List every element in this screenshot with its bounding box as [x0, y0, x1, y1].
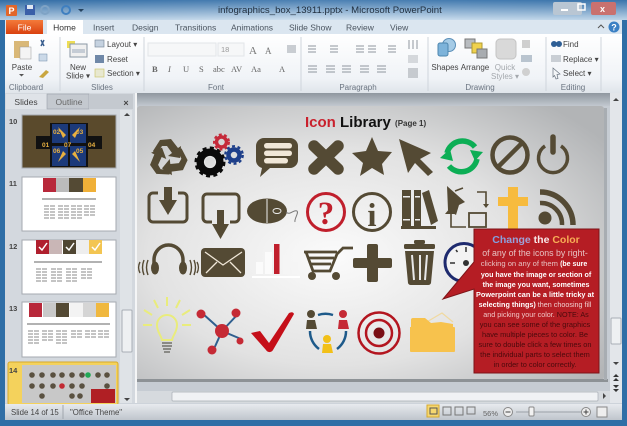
- callout body text: have multiple pieces to color. Be: [482, 330, 588, 339]
- status bar: "Office Theme": [70, 408, 122, 417]
- slides group: New: [70, 63, 86, 72]
- icon: cross: [314, 146, 338, 169]
- slide title: Icon Library: [305, 114, 391, 131]
- icon: information: i: [367, 198, 377, 234]
- editing group: Editing: [561, 83, 585, 92]
- slide number labels: [9, 117, 18, 375]
- panel tabs: [6, 94, 133, 109]
- slides group: Slide ▾: [66, 72, 90, 80]
- panel tabs: ×: [123, 98, 129, 108]
- other tabs: Animations: [231, 22, 273, 32]
- icon: target: [358, 312, 400, 354]
- callout heading: Change the Color: [492, 234, 580, 246]
- font group: I: [167, 64, 172, 74]
- other tabs: [93, 22, 409, 32]
- editor area: [135, 93, 622, 403]
- icon: network: [196, 308, 244, 354]
- slides group: [66, 40, 140, 92]
- icon: mail envelope: [201, 248, 245, 277]
- icon: star: [352, 137, 392, 176]
- icon: mouse: [247, 198, 297, 224]
- thumbnail 12: [22, 240, 116, 294]
- zoom control: [483, 407, 607, 418]
- file tab: [6, 20, 43, 34]
- callout body text: selecting things) then choosing fill: [479, 300, 592, 309]
- icon: prohibited sign: [492, 138, 528, 172]
- drawing group: Styles ▾: [491, 72, 519, 81]
- thumbnail 10: 03: [76, 129, 84, 136]
- drawing group: Quick: [495, 63, 516, 72]
- thumbnail 10: 01: [42, 142, 50, 149]
- paragraph group: Paragraph: [339, 83, 377, 92]
- editing group: [551, 40, 599, 92]
- font group: abc: [213, 64, 225, 74]
- ribbon body: [5, 34, 622, 93]
- thumbnail 14 selection highlight: [8, 362, 118, 405]
- icon: download box: [149, 187, 187, 222]
- thumbnail 14: [22, 365, 116, 403]
- callout body text: Powerpoint can be a little tricky at: [476, 290, 595, 299]
- home tab: Home: [53, 22, 76, 32]
- panel scrollbar: [120, 110, 132, 403]
- callout body text: you can see some of the graphics: [480, 320, 591, 329]
- panel tabs: Slides: [14, 97, 38, 107]
- icon: power: [538, 137, 568, 173]
- icon: gears: [196, 134, 243, 176]
- thumbnail 11: [22, 177, 116, 231]
- slide number labels: 12: [9, 242, 17, 251]
- icon: books: [401, 190, 438, 229]
- panel tabs: Outline: [56, 97, 83, 107]
- icon: gold cross: [498, 187, 528, 230]
- icon: green sync: [440, 141, 483, 172]
- slide number labels: 14: [9, 366, 18, 375]
- icon: information: [354, 194, 390, 234]
- font group: AV: [231, 64, 243, 74]
- view buttons: [427, 405, 475, 417]
- thumbnail 10: 07: [64, 142, 72, 149]
- status bar: Slide 14 of 15: [11, 408, 59, 417]
- icon: chat bubble: [256, 138, 298, 177]
- callout body text: [476, 248, 595, 369]
- icon: upload box: [203, 194, 239, 239]
- icon: cursor: [399, 139, 433, 176]
- slides group: Slides: [91, 83, 113, 92]
- icon: shopping cart: [304, 248, 353, 280]
- clipboard group: Clipboard: [9, 83, 43, 92]
- font group: A: [249, 45, 257, 57]
- icon: light bulb: [143, 297, 191, 352]
- ribbon tabs: [5, 20, 622, 35]
- callout body text: of any of the icons by right-: [482, 248, 588, 258]
- callout body text: sure to double click a few times on: [479, 340, 591, 349]
- font group: Font: [208, 83, 225, 92]
- font group: B: [152, 64, 158, 74]
- editing group: Find: [563, 40, 579, 49]
- icon: plus: [353, 244, 392, 282]
- window controls: [553, 2, 616, 15]
- slides group: Section ▾: [107, 69, 140, 78]
- status bar: [5, 404, 622, 420]
- title bar: [0, 0, 627, 20]
- thumbnail 10: 06: [53, 148, 61, 155]
- slide number labels: 11: [9, 179, 17, 188]
- slides panel: [5, 93, 135, 405]
- icon: headphones: [138, 245, 198, 275]
- thumbnail 10: 02: [53, 129, 61, 136]
- icon: rss: [538, 192, 573, 225]
- callout body text: the individual parts to select them: [480, 350, 590, 359]
- drawing group: Drawing: [465, 83, 495, 92]
- editing group: Replace ▾: [563, 55, 599, 64]
- font group: Aa: [251, 64, 261, 74]
- font group: A: [279, 64, 286, 74]
- thumbnail 10: [22, 115, 116, 168]
- drawing group: Arrange: [461, 63, 490, 72]
- drawing group: Shapes: [431, 63, 459, 72]
- other tabs: Slide Show: [289, 22, 332, 32]
- quick access toolbar: [6, 5, 84, 16]
- editing group: Select ▾: [563, 69, 591, 78]
- icon: resize and arrows: [445, 186, 489, 227]
- slide number labels: 10: [9, 117, 17, 126]
- callout body text: clicking on any of them (be sure: [481, 259, 587, 268]
- other tabs: Transitions: [175, 22, 216, 32]
- font group: S: [199, 64, 204, 74]
- icon: question mark: [308, 194, 344, 232]
- help icons: [598, 22, 620, 32]
- callout body text: in order to color correctly.: [494, 360, 576, 369]
- slide: [137, 106, 608, 382]
- thumbnail 10: 05: [76, 148, 84, 155]
- icon: red check mark: [251, 312, 294, 352]
- callout body text: and picking your color. NOTE: As: [483, 310, 589, 319]
- callout body text: you have the image or section of: [481, 271, 592, 279]
- icon: question mark: ?: [318, 196, 334, 232]
- horizontal scrollbar: [137, 391, 610, 403]
- icon: folder: [410, 313, 455, 352]
- icon: people circle: [306, 310, 349, 353]
- icon: trash can: [404, 240, 435, 285]
- thumbnail 10: 04: [88, 142, 96, 149]
- clipboard group: [9, 40, 49, 92]
- document title: infographics_box_13911.pptx - Microsoft PowerPoint: [218, 5, 442, 16]
- clipboard group: Paste: [12, 63, 33, 72]
- callout body text: the image you want, sometimes: [483, 281, 589, 289]
- font group: [148, 43, 296, 92]
- slides group: Layout ▾: [107, 40, 137, 49]
- vertical scrollbar: [610, 93, 622, 403]
- font group: A: [265, 46, 272, 56]
- drawing group: [431, 38, 532, 92]
- thumbnail 13: [22, 302, 116, 357]
- callout box: [443, 229, 599, 373]
- zoom control: 56%: [483, 409, 498, 418]
- other tabs: Insert: [93, 22, 115, 32]
- icon: clock: [445, 244, 483, 282]
- paragraph group: [308, 40, 418, 92]
- icon: recycle: [145, 139, 192, 180]
- slide number labels: 13: [9, 304, 17, 313]
- quick access toolbar: P: [8, 6, 15, 16]
- file tab: File: [18, 22, 32, 32]
- icon: bar chart: [252, 244, 300, 278]
- font group: U: [183, 64, 189, 74]
- other tabs: Review: [346, 22, 375, 32]
- slides group: Reset: [107, 55, 129, 64]
- window controls: x: [600, 4, 605, 14]
- font group: 18: [221, 45, 229, 54]
- home tab: [47, 20, 83, 35]
- help icons: ?: [611, 22, 617, 32]
- slide title: (Page 1): [395, 119, 426, 128]
- other tabs: Design: [132, 22, 159, 32]
- other tabs: View: [390, 22, 409, 32]
